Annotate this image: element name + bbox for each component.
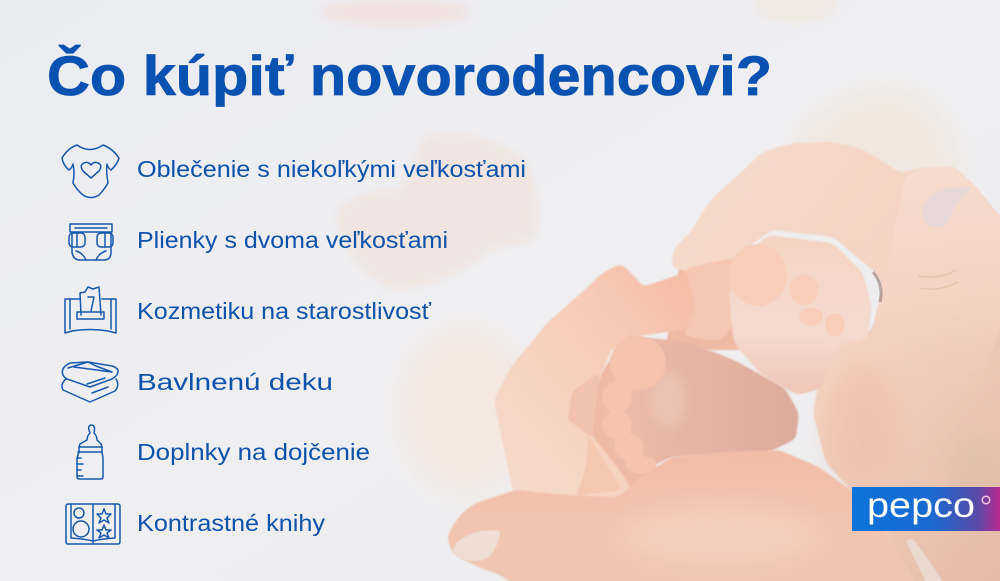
upper foot toes [729,244,845,337]
title: Čo kúpiť novorodencovi? [47,44,772,107]
icon: onesie [62,145,119,198]
icon: book [66,504,120,544]
lower foot sole highlight [650,372,686,428]
wedge of white sheet under the hand [905,538,948,581]
thumbnail, upper right [922,186,976,227]
photo: hands holding baby feet [447,142,1000,581]
underlayer between fingers and feet [575,245,765,505]
lower foot toes [602,336,666,474]
bottom hand palm [447,450,925,581]
pepco logo: pepco [867,486,975,525]
icon: folded blanket [62,362,118,402]
gripping finger [684,258,738,340]
pepco logo [852,486,1000,531]
thumb crease lines [918,270,958,289]
icon: diaper [69,224,113,260]
checklist items [137,156,526,536]
icon: wet wipes [65,287,116,333]
palm highlight [620,505,820,565]
icons [62,145,120,544]
right hand warm shading [826,365,898,485]
item: diapers: Plienky s dvoma veľkosťami [137,227,448,253]
item: contrast books: Kontrastné knihy [137,510,326,536]
right hand thumb [850,167,1000,400]
logo ring [982,496,990,504]
item: blanket: Bavlnenú deku [137,369,333,395]
item: cosmetics: Kozmetiku na starostlivosť [137,298,431,324]
lower thumbnail [452,530,501,561]
inner fingers [568,372,600,440]
shadow gap [873,272,881,302]
lower foot [600,336,799,478]
icon: baby bottle [77,425,103,479]
item: clothes: Oblečenie s niekoľkými veľkosťami [137,156,526,182]
upper foot [729,235,872,395]
right hand hair shading [947,430,1000,530]
left hand [494,264,698,505]
right hand [672,142,1000,581]
item: nursing accessories: Doplnky na dojčenie [137,439,370,465]
